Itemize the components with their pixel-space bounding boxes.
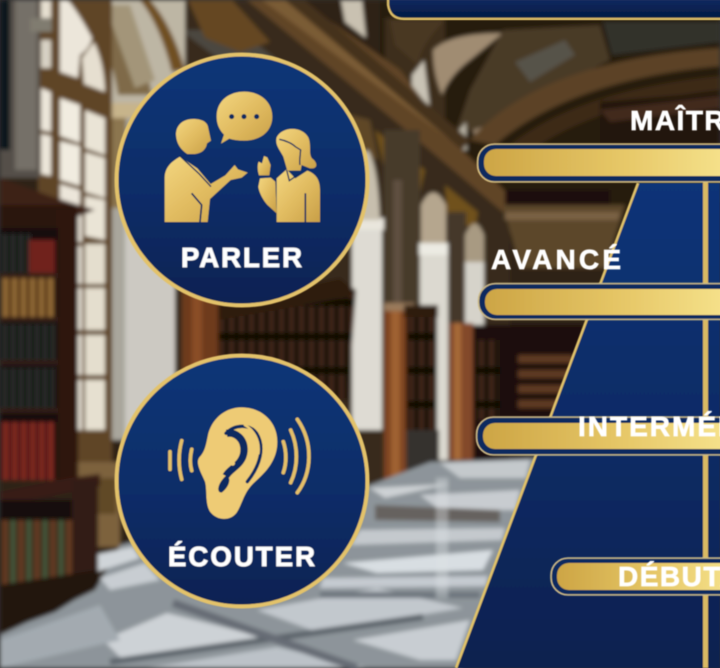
columns <box>182 290 473 483</box>
small upper windows <box>341 0 467 150</box>
vault ceiling <box>380 0 720 240</box>
label: AVANCÉ: AVANCÉ <box>491 244 623 275</box>
level bar: avancé <box>478 284 720 320</box>
marble floor <box>0 458 540 668</box>
icon: ear with sound waves <box>170 407 309 519</box>
badge: ÉCOUTER <box>116 356 368 606</box>
top box, pyramid apex <box>388 0 720 19</box>
side wall under the cornice <box>170 0 510 520</box>
badge: PARLER <box>116 54 368 306</box>
icon: two people talking <box>165 92 320 222</box>
stone frame, upper left <box>0 0 52 178</box>
arches and pilasters <box>350 130 484 460</box>
level bar: maître <box>478 144 720 182</box>
cornice running to vanishing point <box>247 0 625 268</box>
pyramid panel <box>455 180 720 668</box>
window wall and vault <box>38 0 185 547</box>
caption: PARLER: PARLER <box>181 242 304 273</box>
left bookcase <box>0 178 100 632</box>
mid bookcases <box>218 278 583 470</box>
level bar: intermédiaire <box>476 417 720 455</box>
level bar: débutant <box>551 558 720 595</box>
caption: ÉCOUTER: ÉCOUTER <box>168 541 317 572</box>
